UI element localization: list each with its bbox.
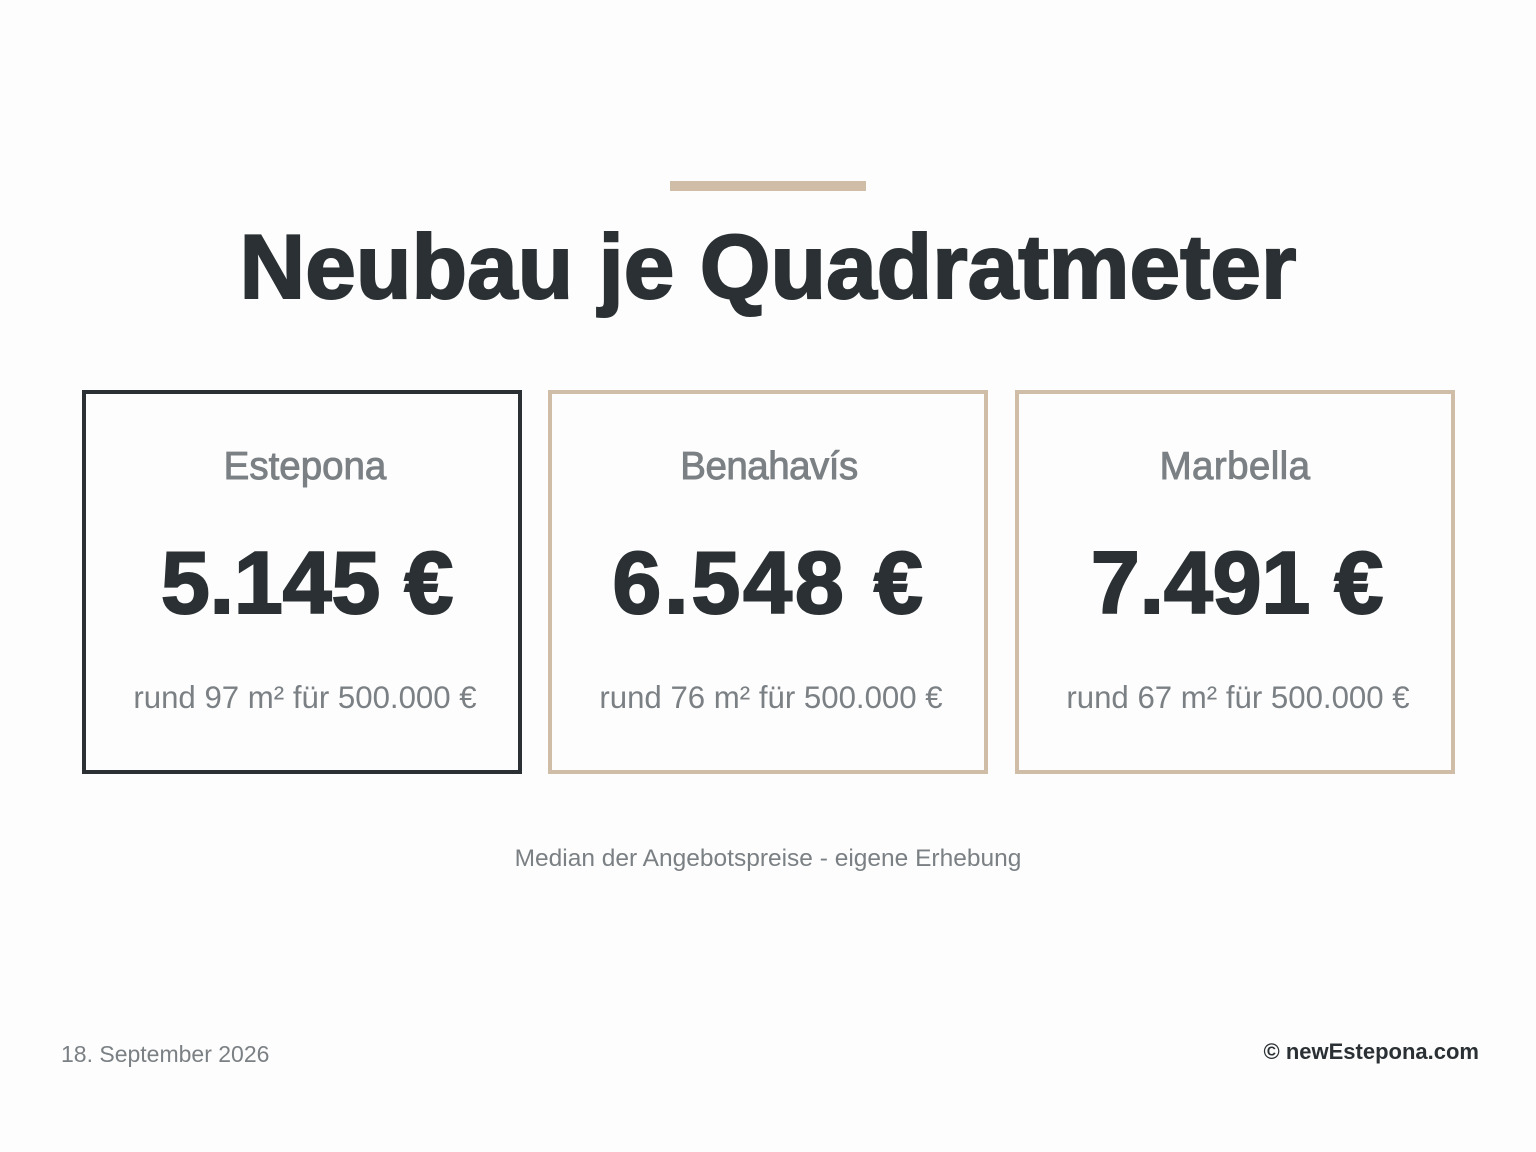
Marbella note: rund 67 m² für 500.000 € [1066,680,1410,715]
Estepona note: rund 97 m² für 500.000 € [133,680,477,715]
Estepona price: 5.145 € [161,533,453,632]
date: 18. September 2026 [61,1041,269,1067]
Estepona name: Estepona [224,445,386,488]
Benahavís name: Benahavís [680,445,858,488]
Benahavís note: rund 76 m² für 500.000 € [599,680,943,715]
panel: Benahavís [548,390,988,774]
accent bar [670,181,866,191]
panel: Marbella [1015,390,1455,774]
title: Neubau je Quadratmeter [240,217,1296,318]
panel: Estepona [82,390,522,774]
Benahavís price: 6.548 € [612,533,926,632]
copyright: © newEstepona.com [1264,1039,1479,1064]
source note: Median der Angebotspreise - eigene Erhebung [515,845,1021,872]
Marbella price: 7.491 € [1091,533,1383,632]
Marbella name: Marbella [1160,445,1310,488]
